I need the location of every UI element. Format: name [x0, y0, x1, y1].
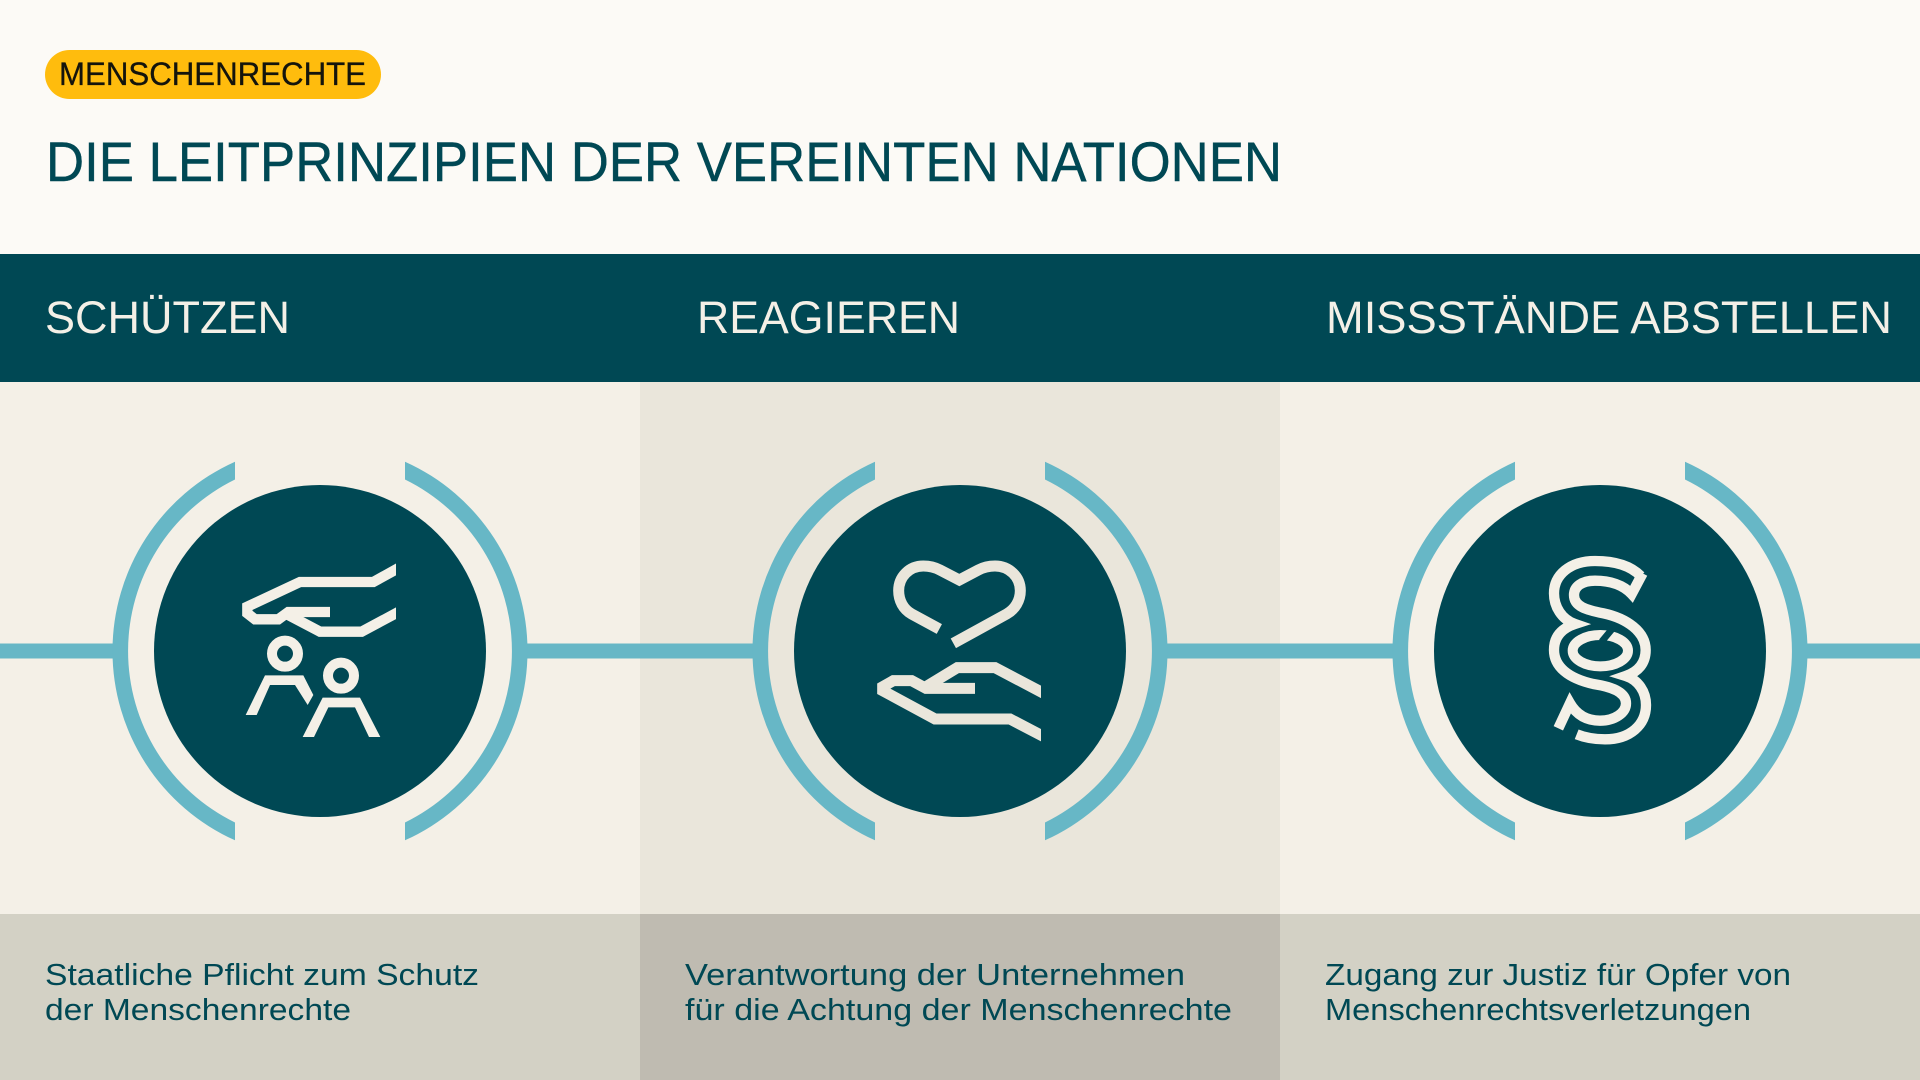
node: Reagieren — [752, 462, 1168, 840]
panel: description Reagieren — [640, 914, 1280, 1080]
dark circle — [1434, 485, 1766, 817]
icon: paragraph sign — [1554, 561, 1646, 739]
dark circle — [794, 485, 1126, 817]
panel: column backgrounds — [0, 382, 1920, 914]
panel: description Missstände abstellen: Menschenrechtsverletzungen — [1325, 992, 1751, 1027]
header band with column headings — [0, 254, 1920, 382]
panel: description Schützen — [0, 914, 640, 1080]
title: DIE LEITPRINZIPIEN DER VEREINTEN NATIONEN — [46, 130, 1282, 193]
heading: Missstände abstellen: MISSSTÄNDE ABSTELLEN — [1326, 292, 1892, 343]
connecting timeline line — [0, 644, 1920, 658]
heading: Reagieren: REAGIEREN — [697, 292, 960, 343]
panel: description Reagieren: für die Achtung der Menschenrechte — [685, 992, 1232, 1027]
node: Schützen — [112, 462, 528, 840]
ring arcs — [1392, 462, 1808, 840]
badge: Menschenrechte — [45, 50, 381, 99]
panel: description Schützen: der Menschenrechte — [45, 992, 351, 1027]
panel: description Missstände abstellen: Zugang zur Justiz für Opfer von — [1325, 957, 1791, 992]
node: Missstände abstellen — [1392, 462, 1808, 840]
ring arcs — [752, 462, 1168, 840]
panel: description Reagieren: Verantwortung der Unternehmen — [685, 957, 1185, 992]
panel: description Missstände abstellen — [1280, 914, 1920, 1080]
panel: description Schützen: Staatliche Pflicht zum Schutz — [45, 957, 479, 992]
dark circle — [154, 485, 486, 817]
badge: Menschenrechte: MENSCHENRECHTE — [59, 56, 366, 92]
heading: Schützen: SCHÜTZEN — [45, 292, 290, 343]
icon: heart above open hand — [883, 566, 1053, 742]
ring arcs — [112, 462, 528, 840]
icon: hand protecting two people — [246, 565, 403, 737]
